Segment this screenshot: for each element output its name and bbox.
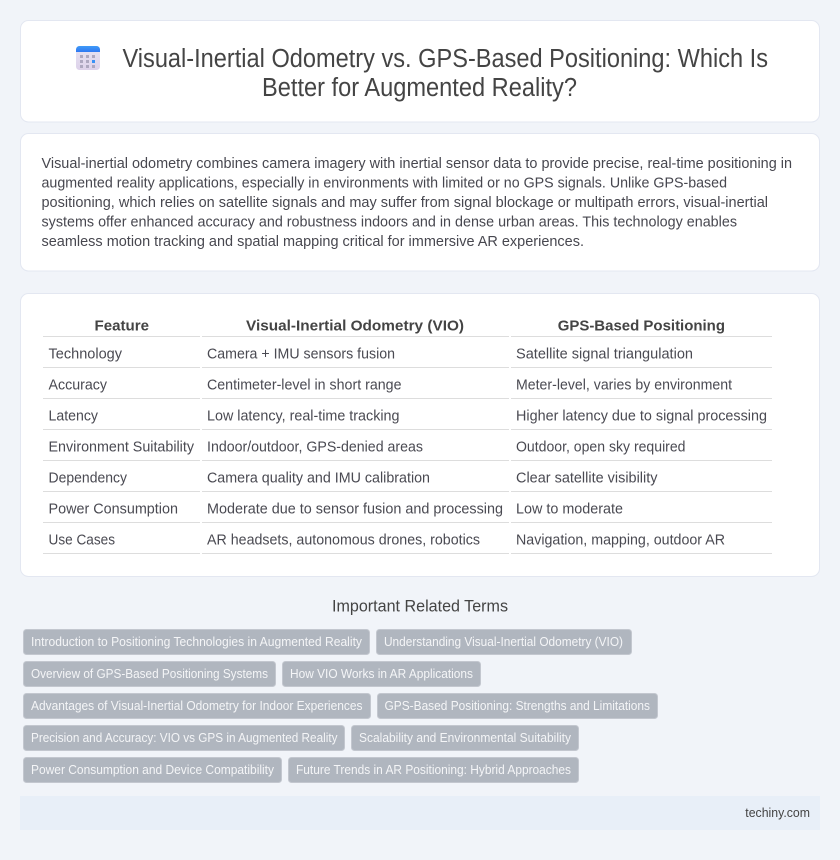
title: [122, 45, 768, 102]
table row: Technology: Technology: [48, 346, 123, 362]
tag: GPS-Based Positioning: Strengths and Limitations: [384, 699, 650, 713]
panel: header: [20, 20, 820, 122]
text block: introduction paragraph: [42, 155, 792, 250]
text block: introduction paragraph: Visual-inertial odometry combines camera imagery with inertial sensor data to provide precise, real-time positioning in: [42, 155, 792, 172]
table row: Latency: Low latency, real-time tracking: [207, 408, 400, 424]
table row: Use Cases: Navigation, mapping, outdoor AR: [516, 532, 725, 548]
table row: Environment Suitability: Indoor/outdoor, GPS-denied areas: [207, 439, 423, 455]
table row: Accuracy: Meter-level, varies by environment: [516, 377, 732, 393]
table row: Latency: [48, 408, 767, 424]
tag: Future Trends in AR Positioning: Hybrid Approaches: [296, 763, 571, 777]
tag: [288, 758, 578, 782]
table row: Use Cases: [48, 532, 725, 548]
text block: introduction paragraph: seamless motion tracking and spatial mapping critical for immersive AR experiences.: [42, 233, 584, 250]
tag: [282, 662, 480, 686]
table row: Power Consumption: Low to moderate: [516, 501, 623, 517]
table row: Dependency: Clear satellite visibility: [516, 470, 658, 486]
panel: introduction: [20, 134, 820, 271]
tag: How VIO Works in AR Applications: [290, 667, 473, 681]
table row: Dependency: [48, 470, 658, 486]
icon: calendar: [76, 46, 100, 70]
tag: Understanding Visual-Inertial Odometry (VIO): [384, 635, 623, 649]
table row: Dependency: Camera quality and IMU calibration: [207, 470, 430, 486]
tag: [378, 694, 658, 718]
tag list: related terms: [24, 630, 658, 782]
table row: Accuracy: [48, 377, 732, 393]
tag: Overview of GPS-Based Positioning Systems: [31, 667, 268, 681]
tag: [24, 726, 344, 750]
table header row: Feature: [94, 318, 149, 334]
table row: Power Consumption: Power Consumption: [48, 501, 178, 517]
table row: Latency: Latency: [48, 408, 99, 424]
table header row: [94, 318, 725, 334]
table row: Power Consumption: [48, 501, 623, 517]
text block: introduction paragraph: positioning, which relies on satellite signals and may suffer from signal blockage or multipath errors, visual-inertial: [42, 194, 768, 211]
tag: [352, 726, 578, 750]
tag: Advantages of Visual-Inertial Odometry for Indoor Experiences: [31, 699, 362, 713]
text block: introduction paragraph: augmented reality applications, especially in environments with limited or no GPS signals. Unlike GPS-based: [42, 174, 727, 192]
tag: Precision and Accuracy: VIO vs GPS in Augmented Reality: [31, 731, 338, 745]
title: Better for Augmented Reality?: [262, 74, 577, 102]
tag: [24, 630, 370, 654]
tag: Introduction to Positioning Technologies in Augmented Reality: [31, 635, 363, 649]
tag: Scalability and Environmental Suitability: [359, 731, 572, 745]
title: Visual-Inertial Odometry vs. GPS-Based Positioning: Which Is: [122, 45, 768, 73]
heading: Important Related Terms: Important Related Terms: [332, 598, 508, 616]
tag: [376, 630, 632, 654]
table row: Power Consumption: Moderate due to sensor fusion and processing: [207, 501, 503, 517]
table row: Use Cases: Use Cases: [48, 532, 115, 548]
table row: Technology: [48, 346, 693, 362]
panel: comparison table: [20, 294, 820, 576]
table row: Accuracy: Centimeter-level in short range: [207, 377, 402, 393]
table row: Environment Suitability: Environment Suitability: [48, 439, 195, 455]
table row: Environment Suitability: Outdoor, open sky required: [516, 439, 686, 455]
table row: Accuracy: Accuracy: [48, 377, 108, 393]
footer: techiny.com: [745, 806, 810, 820]
table header row: Visual-Inertial Odometry (VIO): [246, 318, 464, 334]
table row: Technology: Satellite signal triangulation: [516, 346, 693, 362]
table row: Dependency: Dependency: [48, 470, 128, 486]
table header row: GPS-Based Positioning: [558, 318, 725, 334]
tag: [24, 694, 370, 718]
table row: Environment Suitability: [48, 439, 686, 455]
tag: Power Consumption and Device Compatibility: [31, 763, 275, 777]
footer: [20, 796, 820, 830]
table row: Use Cases: AR headsets, autonomous drones, robotics: [207, 532, 480, 548]
table row: Technology: Camera + IMU sensors fusion: [207, 346, 395, 362]
tag: [24, 758, 282, 782]
tag: [24, 662, 276, 686]
text block: introduction paragraph: systems offer enhanced accuracy and robustness indoors and in dense urban areas. This technology enables: [42, 214, 737, 230]
table row: Latency: Higher latency due to signal processing: [516, 408, 767, 424]
